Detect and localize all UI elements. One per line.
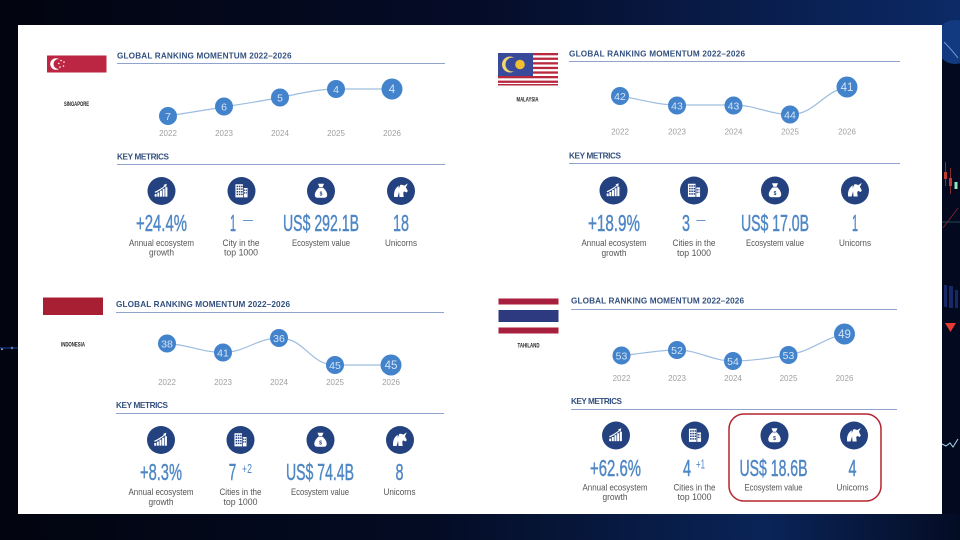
line chart: ranking: 43	[671, 100, 683, 112]
metric: ecosystem value	[283, 177, 359, 248]
line chart: ranking: 2025	[781, 128, 799, 136]
line chart: ranking: 5	[277, 92, 283, 104]
metric: ecosystem value: $	[773, 436, 776, 442]
metric: ecosystem value: $	[319, 440, 322, 446]
metric: growth: growth	[149, 248, 174, 258]
metric: unicorns: 8	[396, 459, 404, 485]
line chart: ranking: 2025	[327, 129, 345, 138]
metric: ecosystem value: US$ 74.4B	[286, 459, 354, 485]
line chart: ranking: 42	[614, 91, 626, 103]
line chart: ranking: 43	[728, 100, 739, 112]
metric: growth: +24.4%	[136, 210, 187, 236]
line chart: ranking: 38	[161, 338, 173, 350]
line chart: ranking	[612, 324, 855, 383]
line chart: ranking	[159, 78, 402, 138]
metric: cities: 3	[682, 210, 690, 236]
metric: unicorns: 1	[852, 210, 858, 236]
metric: growth: +62.6%	[590, 455, 641, 481]
metric: cities	[674, 422, 716, 502]
line chart: ranking: 45	[385, 360, 397, 372]
callout: red highlight box	[729, 414, 881, 501]
panel: Indonesia	[43, 298, 444, 507]
metric: unicorns: 18	[393, 210, 409, 236]
line chart: ranking: 2026	[382, 378, 400, 387]
line chart: ranking: 2022	[611, 128, 629, 136]
line chart: ranking: 2026	[838, 128, 856, 136]
metric: cities: top 1000	[678, 492, 712, 502]
line chart: ranking: 53	[616, 350, 627, 362]
heading: key metrics: KEY METRICS	[571, 397, 623, 406]
metric: growth: Annual ecosystem	[582, 238, 646, 248]
line chart: ranking: 2024	[724, 374, 742, 383]
line chart: ranking: 2025	[780, 374, 798, 383]
metric: growth: Annual ecosystem	[128, 487, 194, 497]
heading: key metrics: KEY METRICS	[569, 152, 622, 160]
heading: ranking momentum: GLOBAL RANKING MOMENTUM 2022–2026	[569, 50, 745, 58]
metric: cities: —	[243, 212, 253, 227]
metric: growth	[582, 176, 646, 258]
line chart: ranking: 41	[841, 82, 853, 94]
line chart: ranking: 45	[329, 360, 341, 372]
metric: ecosystem value: $	[320, 192, 323, 198]
metric: growth: growth	[602, 248, 626, 258]
metric: cities: Cities in the	[672, 238, 716, 248]
flag: Singapore	[47, 56, 106, 72]
metric: growth: Annual ecosystem	[582, 482, 648, 492]
metric: cities: top 1000	[224, 497, 258, 507]
metric: ecosystem value: US$ 292.1B	[283, 210, 359, 236]
line chart: ranking: 2023	[215, 129, 233, 138]
metric: unicorns: Unicorns	[836, 482, 869, 492]
metric: growth: growth	[148, 497, 174, 507]
metric: growth: growth	[602, 492, 628, 502]
metric: cities: top 1000	[677, 248, 711, 258]
metric: unicorns	[385, 177, 417, 248]
metric: unicorns: Unicorns	[384, 487, 416, 497]
line chart: ranking: 4	[389, 84, 396, 96]
flag: Malaysia	[498, 53, 558, 86]
line chart: ranking: 2024	[725, 128, 743, 136]
line chart: ranking: 2022	[158, 378, 176, 387]
line chart: ranking: 2023	[214, 378, 232, 387]
metric: cities	[220, 426, 262, 507]
line chart: ranking: 52	[671, 345, 683, 357]
line chart: ranking: 2024	[270, 378, 288, 387]
metric: cities: +1	[696, 456, 705, 472]
metric: ecosystem value: US$ 17.0B	[741, 210, 809, 236]
line chart: ranking: 7	[165, 111, 171, 123]
line chart: ranking: 2024	[271, 129, 289, 138]
metric: growth: +8.3%	[140, 459, 182, 485]
metric: cities: 4	[683, 455, 691, 481]
metric: cities: Cities in the	[674, 482, 716, 492]
panel: Malaysia	[498, 50, 900, 258]
line chart: ranking: 49	[838, 329, 851, 341]
metric: ecosystem value: US$ 18.6B	[740, 455, 808, 481]
line chart: ranking: 2026	[836, 374, 854, 383]
metric: ecosystem value: Ecosystem value	[744, 482, 802, 492]
line chart: ranking: 6	[221, 102, 227, 114]
heading: key metrics: KEY METRICS	[117, 152, 170, 162]
metric: unicorns	[839, 176, 871, 248]
heading: ranking momentum: GLOBAL RANKING MOMENTUM 2022–2026	[117, 52, 292, 60]
metric: ecosystem value	[740, 422, 808, 492]
heading: key metrics: KEY METRICS	[116, 401, 169, 410]
metric: ecosystem value: Ecosystem value	[746, 238, 804, 248]
line chart: ranking: 36	[273, 333, 285, 345]
metric: growth	[128, 426, 194, 507]
metric: cities: City in the	[222, 238, 260, 248]
panel: Singapore	[47, 52, 445, 258]
metric: cities	[672, 176, 716, 258]
metric: ecosystem value	[286, 426, 354, 497]
metric: cities: —	[696, 212, 706, 227]
metric: unicorns: Unicorns	[385, 238, 417, 248]
panel: Thailand	[498, 296, 897, 502]
heading: ranking momentum: GLOBAL RANKING MOMENTUM 2022–2026	[116, 300, 290, 309]
country name: MALAYSIA	[516, 96, 539, 104]
line chart: ranking	[158, 329, 402, 387]
line chart: ranking: 53	[783, 350, 794, 362]
line chart: ranking: 4	[333, 84, 339, 96]
line chart: ranking: 44	[784, 110, 796, 122]
metric: cities: top 1000	[224, 248, 258, 258]
line chart: ranking: 2022	[613, 374, 631, 383]
metric: growth	[582, 422, 648, 502]
flag: Indonesia	[43, 298, 103, 315]
metric: cities: 7	[229, 459, 236, 485]
line chart: ranking: 2026	[383, 129, 401, 138]
metric: growth	[129, 177, 194, 258]
metric: cities	[222, 177, 260, 258]
line chart: ranking	[611, 76, 858, 136]
metric: unicorns: Unicorns	[839, 238, 871, 248]
metric: ecosystem value: Ecosystem value	[292, 238, 350, 248]
metric: unicorns	[384, 426, 416, 497]
line chart: ranking: 2025	[326, 378, 344, 387]
metric: ecosystem value: $	[774, 191, 777, 197]
metric: ecosystem value	[741, 176, 809, 248]
metric: cities: Cities in the	[220, 487, 262, 497]
metric: unicorns: 4	[848, 455, 857, 481]
country name: INDONESIA	[61, 342, 85, 348]
metric: growth: Annual ecosystem	[129, 238, 194, 248]
flag: Thailand	[498, 298, 558, 334]
line chart: ranking: 41	[217, 348, 229, 360]
line chart: ranking: 2023	[668, 128, 686, 136]
heading: ranking momentum: GLOBAL RANKING MOMENTUM 2022–2026	[571, 296, 744, 306]
line chart: ranking: 2023	[668, 374, 686, 383]
metric: ecosystem value: Ecosystem value	[291, 487, 349, 497]
metric: cities: +2	[242, 461, 252, 476]
metric: cities: 1	[230, 210, 236, 236]
line chart: ranking: 54	[727, 356, 739, 368]
country name: SINGAPORE	[64, 101, 89, 108]
line chart: ranking: 2022	[159, 129, 177, 138]
metric: growth: +18.9%	[588, 210, 640, 236]
metric: unicorns	[836, 422, 869, 492]
country name: TAHILAND	[518, 342, 540, 350]
